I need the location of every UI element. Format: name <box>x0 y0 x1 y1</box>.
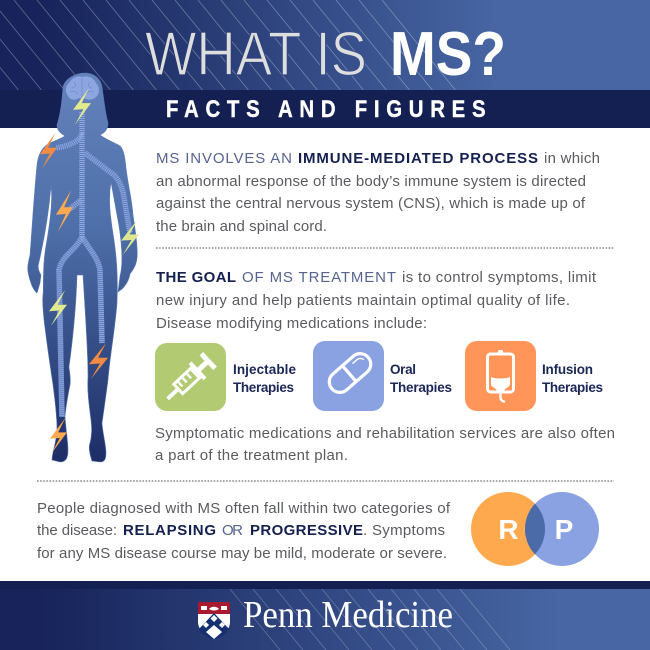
icon: syringe <box>155 343 226 411</box>
text block: immune-mediated process: the brain and spinal cord. <box>156 218 327 235</box>
text block: immune-mediated process <box>156 150 600 235</box>
lightning bolts <box>40 88 139 453</box>
text block: disease categories: People diagnosed with MS often fall within two categories of <box>37 500 451 517</box>
nerve pathways <box>56 112 130 417</box>
text block: immune-mediated process: IMMUNE-MEDIATED PROCESS <box>298 150 538 167</box>
text block: goal of treatment <box>156 269 597 332</box>
injectable therapies: Therapies <box>233 380 294 395</box>
text block: goal of treatment: THE GOAL <box>156 269 236 286</box>
text block: goal of treatment: is to control symptoms, limit <box>402 269 597 286</box>
text block: immune-mediated process: an abnormal response of the body’s immune system is directed <box>156 173 586 190</box>
text block: disease categories: OR <box>222 522 243 539</box>
oral therapies <box>313 341 452 411</box>
text block: disease categories: PROGRESSIVE <box>250 522 363 539</box>
text block: symptomatic medications: Symptomatic medications and rehabilitation services are also often <box>155 425 615 442</box>
human body figure <box>28 73 139 462</box>
title <box>145 20 506 89</box>
venn diagram: relapsing and progressive: P <box>555 514 573 545</box>
icon: capsule <box>313 341 384 411</box>
oral therapies: Therapies <box>390 380 452 395</box>
title: MS? <box>390 20 506 89</box>
text block: disease categories <box>37 500 451 562</box>
text block: symptomatic medications <box>155 425 615 464</box>
label: Oral <box>390 362 416 377</box>
text block: symptomatic medications: a part of the treatment plan. <box>155 447 348 464</box>
subtitle: FACTS AND FIGURES <box>166 95 486 122</box>
text block: goal of treatment: new injury and help patients maintain optimal quality of life. <box>156 292 570 309</box>
body silhouette <box>28 73 137 462</box>
text block: immune-mediated process: MS INVOLVES AN <box>156 150 292 167</box>
text block: immune-mediated process: in which <box>544 150 600 167</box>
text block: immune-mediated process: against the central nervous system (CNS), which is made up of <box>156 195 586 212</box>
text block: disease categories: . Symptoms <box>363 522 445 539</box>
penn medicine wordmark: Penn Medicine <box>243 594 453 636</box>
label: Injectable <box>233 362 296 377</box>
injectable therapies <box>155 343 296 411</box>
title: WHAT IS <box>145 20 367 89</box>
venn diagram: relapsing and progressive: R <box>498 514 519 545</box>
text block: disease categories: the disease: <box>37 522 117 539</box>
text block: disease categories: RELAPSING <box>123 522 216 539</box>
footer banner <box>0 581 650 650</box>
penn shield logo <box>198 602 230 640</box>
icon: IV bag <box>465 341 536 411</box>
text block: goal of treatment: Disease modifying medications include: <box>156 315 427 332</box>
label: Infusion <box>542 362 593 377</box>
text block: disease categories: for any MS disease course may be mild, moderate or severe. <box>37 545 447 562</box>
text block: goal of treatment: OF MS TREATMENT <box>242 269 396 286</box>
infusion therapies <box>465 341 603 411</box>
infusion therapies: Therapies <box>542 380 603 395</box>
venn diagram: relapsing and progressive <box>471 492 599 566</box>
header banner <box>0 0 650 128</box>
brain <box>66 76 99 100</box>
